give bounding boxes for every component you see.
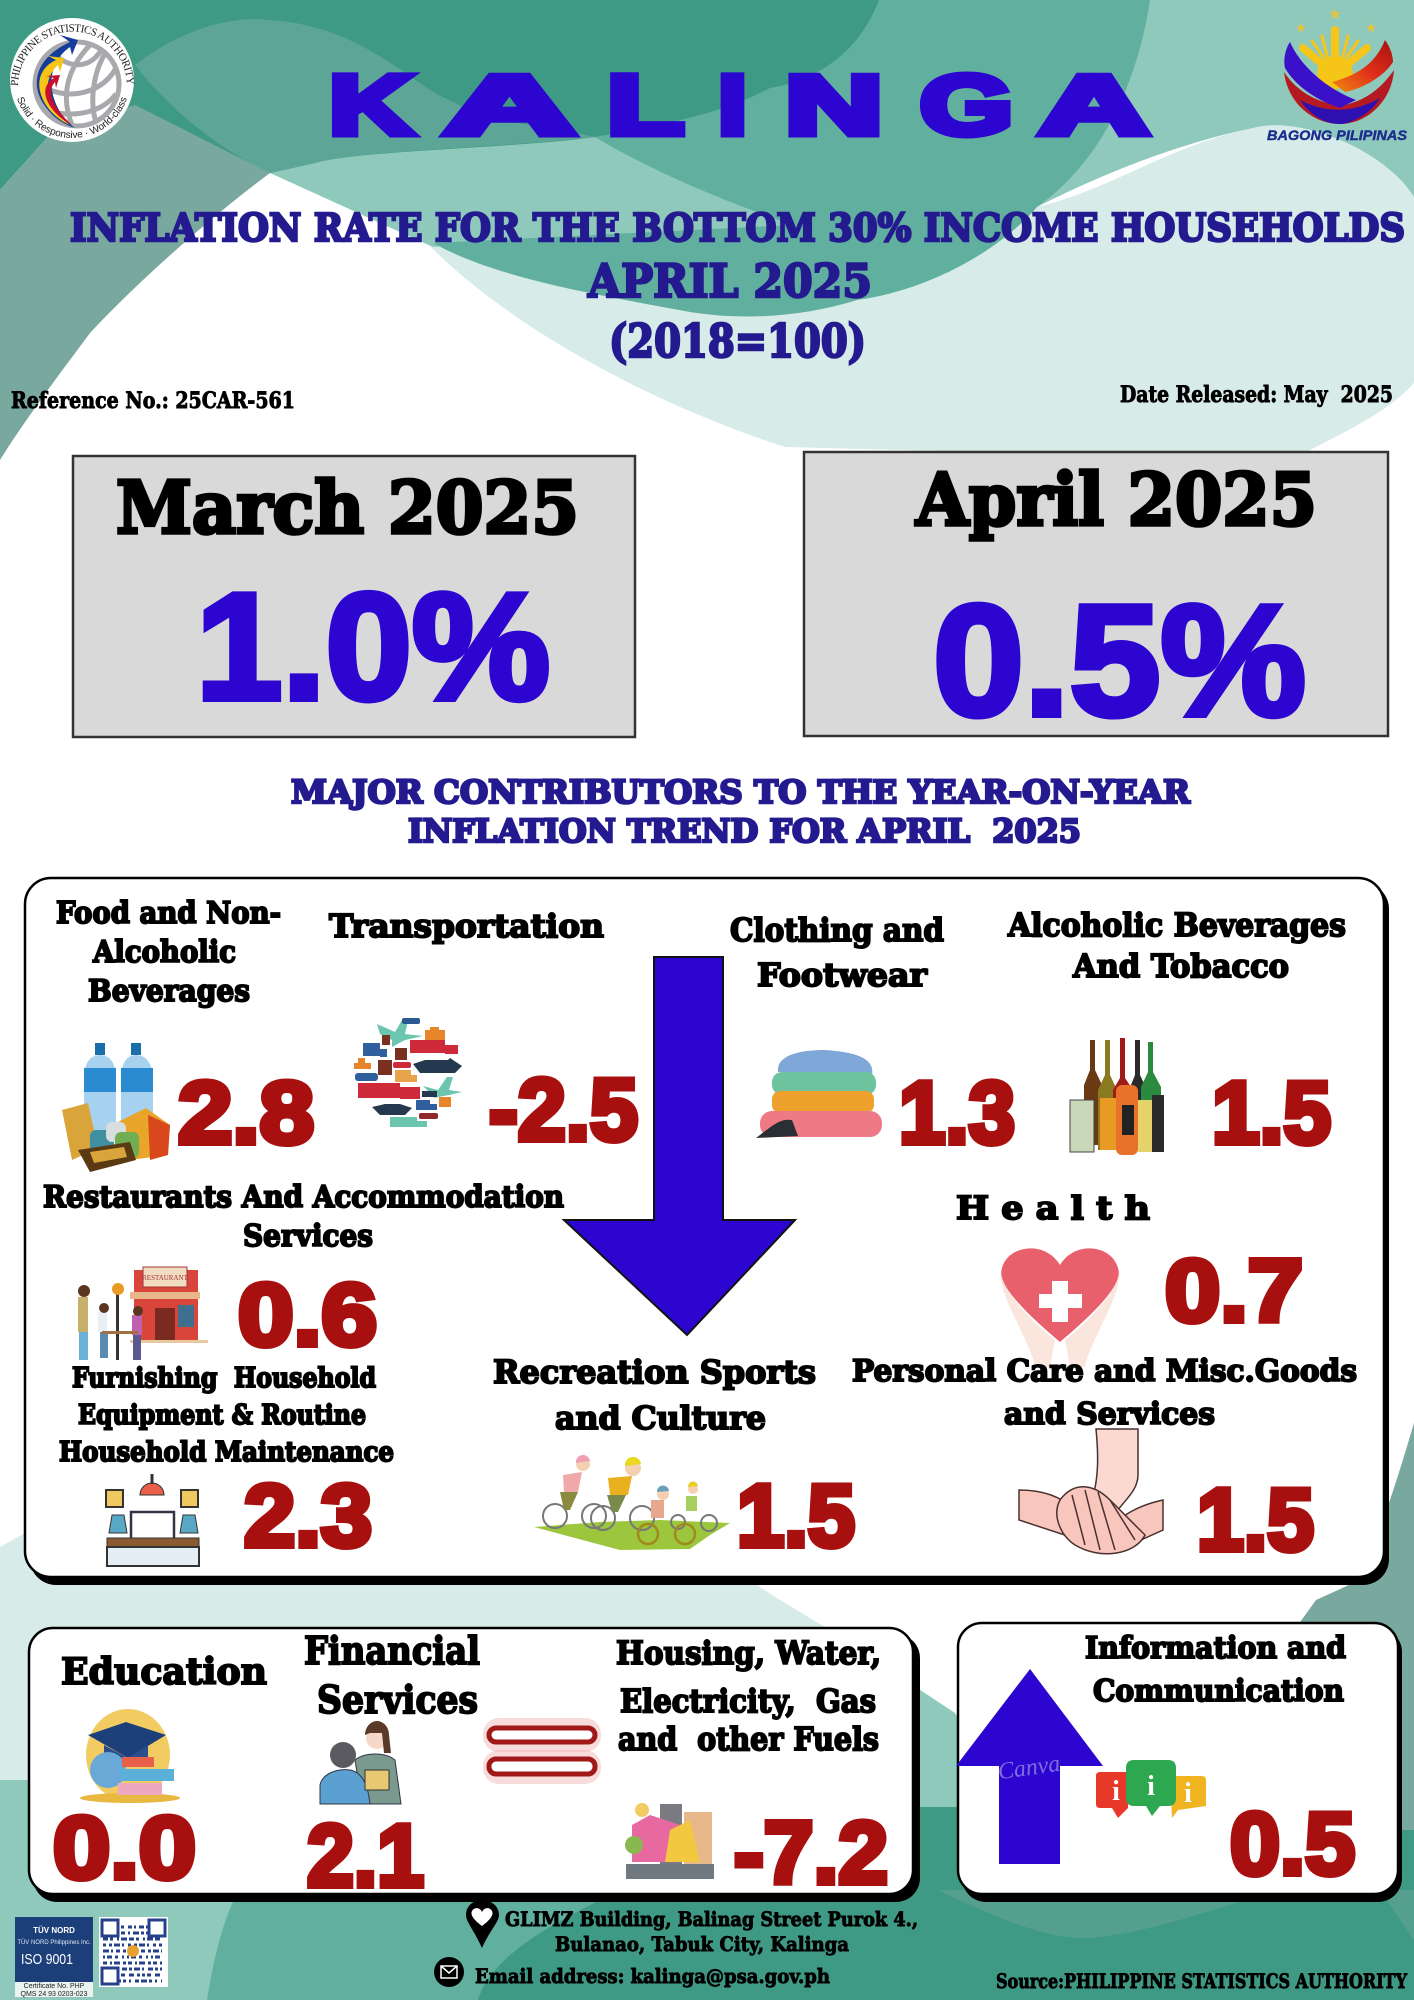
item: transportation [329,907,638,1159]
panel: April 2025 [804,452,1388,749]
panel: main contributors [25,878,1389,1585]
panel: information and communication [956,1623,1402,1902]
item: personal care and misc goods: 1.5 [1197,1470,1314,1569]
badge: ISO 9001 certification [15,1917,93,1998]
badge: ISO 9001 certification: Certificate No. PHP [24,1983,85,1990]
heading: inflation rate subtitle: (2018=100) [609,314,866,368]
title: Kalinga: I [718,58,747,152]
item: clothing and footwear [730,911,1015,1162]
item: financial services: Services [317,1677,478,1722]
item: housing water electricity: and other Fuels [618,1720,879,1758]
icon: equals sign [483,1718,601,1784]
heading: inflation rate subtitle [70,205,1405,368]
heading: inflation rate subtitle: APRIL 2025 [587,254,872,308]
item: financial services [304,1628,480,1905]
item: restaurants and accommodation: RESTAURANT [142,1274,189,1282]
contact address: GLIMZ Building, Balinag Street Purok 4., [505,1907,918,1931]
item: transportation: Transportation [329,907,604,945]
title: Kalinga: N [785,58,883,152]
panel: April 2025: 0.5% [933,573,1306,749]
icon: email [434,1957,464,1987]
item: housing water electricity [616,1634,888,1902]
item: furnishing household equipment: 2.3 [244,1466,372,1565]
item: food and non-alcoholic beverages: Food and Non- [56,896,281,931]
heading: major contributors: INFLATION TREND FOR APRIL 2025 [408,812,1081,850]
QR code [99,1917,168,1987]
item: financial services: Financial [304,1628,480,1673]
heading: major contributors: MAJOR CONTRIBUTORS TO THE YEAR-ON-YEAR [291,773,1190,811]
panel: information and communication: 0.5 [1230,1794,1355,1893]
logo: Bagong Pilipinas [1267,5,1408,143]
item: clothing and footwear: Footwear [757,956,928,994]
item: furnishing household equipment: Furnishing Household [72,1363,376,1394]
item: recreation sports and culture: 1.5 [737,1466,855,1565]
item: recreation sports and culture: and Culture [555,1399,766,1437]
logo: Bagong Pilipinas: ★ [1365,21,1377,36]
icon: information bubbles: i [1184,1778,1192,1809]
item: transportation: -2.5 [489,1060,638,1159]
icon: information bubbles [1096,1760,1206,1818]
arrow: down [564,957,795,1335]
icon: location pin [466,1900,499,1948]
panel: April 2025: April 2025 [915,457,1317,542]
title: Kalinga: K [329,58,413,152]
item: furnishing household equipment: Household Maintenance [59,1437,394,1468]
logo: Bagong Pilipinas: ★ [1328,5,1342,23]
item: restaurants and accommodation [43,1180,564,1364]
title: Kalinga: A [1039,58,1149,152]
icon: information bubbles: i [1112,1776,1120,1807]
panel: education, financial, housing [29,1628,920,1905]
contact address [505,1907,918,1956]
heading: major contributors [291,773,1190,850]
item: food and non-alcoholic beverages: Alcoholic [92,935,236,970]
badge: ISO 9001 certification: TÜV NORD [33,1926,75,1935]
title: Kalinga: L [607,58,684,152]
item: restaurants and accommodation: Services [243,1219,373,1254]
logo: Bagong Pilipinas: BAGONG PILIPINAS [1267,127,1408,143]
item: health [956,1189,1303,1367]
badge: ISO 9001 certification: TÜV NORD Philippines Inc. [17,1939,91,1946]
item: personal care and misc goods: Personal Care and Misc.Goods [852,1354,1357,1389]
icon: information bubbles: i [1147,1771,1155,1802]
item: alcoholic beverages and tobacco [1007,906,1346,1162]
item: health: H e a l t h [956,1189,1150,1227]
item: clothing and footwear: Clothing and [730,911,944,949]
arrow: up [956,1669,1103,1864]
item: education: 0.0 [53,1798,196,1897]
item: alcoholic beverages and tobacco: 1.5 [1212,1063,1331,1162]
item: alcoholic beverages and tobacco: Alcoholic Beverages [1007,906,1346,944]
item: furnishing household equipment [59,1363,394,1566]
reference number: Reference No.: 25CAR-561 [11,388,295,414]
badge: ISO 9001 certification: ISO 9001 [21,1951,73,1968]
item: food and non-alcoholic beverages [56,896,314,1172]
item: personal care and misc goods: and Services [1004,1397,1215,1432]
panel: information and communication: Communication [1093,1674,1344,1709]
item: food and non-alcoholic beverages: 2.8 [178,1063,314,1162]
logo: Philippine Statistics Authority [10,18,134,142]
contact email: Email address: kalinga@psa.gov.ph [475,1964,830,1988]
title: Kalinga: A [444,58,575,152]
item: alcoholic beverages and tobacco: And Tobacco [1072,947,1289,985]
item: housing water electricity: -7.2 [734,1803,888,1902]
title: Kalinga [329,58,1149,152]
arrow: up: Canva [996,1751,1062,1785]
panel: March 2025: March 2025 [116,465,579,550]
panel: information and communication: Information and [1085,1631,1346,1666]
item: personal care and misc goods [852,1354,1357,1569]
item: recreation sports and culture [493,1353,855,1565]
item: food and non-alcoholic beverages: Beverages [88,974,250,1009]
badge: ISO 9001 certification: QMS 24 93 0203-023 [21,1991,88,1998]
item: housing water electricity: Electricity, Gas [620,1682,876,1720]
logo: Bagong Pilipinas: ★ [1295,21,1307,36]
item: restaurants and accommodation: 0.6 [238,1265,377,1364]
title: Kalinga: G [920,58,1013,152]
item: financial services: 2.1 [307,1806,424,1905]
logo: Philippine Statistics Authority: Solid · Responsive · World-class [18,97,126,138]
item: restaurants and accommodation: Restaurants And Accommodation [43,1180,564,1215]
item: furnishing household equipment: Equipment & Routine [78,1400,366,1431]
contact address: Bulanao, Tabuk City, Kalinga [555,1932,849,1956]
item: health: 0.7 [1165,1241,1303,1340]
item: clothing and footwear: 1.3 [899,1063,1015,1162]
item: education [53,1651,267,1897]
item: recreation sports and culture: Recreation Sports [493,1353,816,1391]
item: education: Education [61,1651,267,1693]
logo: Philippine Statistics Authority: PHILIPPINE STATISTICS AUTHORITY [10,24,134,86]
panel: March 2025 [73,456,635,737]
item: housing water electricity: Housing, Water, [616,1634,881,1672]
panel: March 2025: 1.0% [196,562,550,732]
